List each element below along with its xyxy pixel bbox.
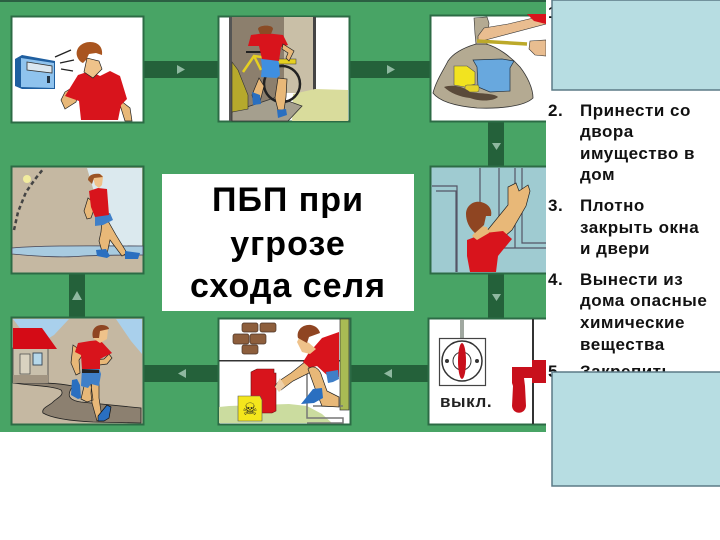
instruction list: Закрепить (580, 362, 672, 381)
icon: sack (433, 44, 533, 108)
title: схода селя (190, 267, 386, 305)
center title panel (162, 174, 414, 311)
instruction list: Вынести из (580, 270, 683, 289)
panel 3: man packs valuables in bag (430, 14, 550, 122)
arrow: panel 3 to 5 (488, 121, 504, 166)
figure: man (466, 183, 530, 272)
instruction list: дом (580, 165, 615, 184)
arrow: panel 8 to 7 (351, 365, 428, 382)
icon: gas valve (512, 360, 546, 413)
instruction list: и двери (580, 239, 650, 258)
switch label: выкл. (440, 392, 492, 411)
panel 7: man removes hazardous chemicals (218, 318, 350, 424)
icon: sack (232, 62, 248, 112)
icon: door frame (307, 319, 349, 423)
panel 5: man closes window (430, 166, 550, 274)
arrow: panel 2 to 3 (350, 61, 430, 78)
arrow: panel 7 to 6 (143, 365, 218, 382)
figure: man (275, 325, 339, 407)
icon: arm with tie (477, 14, 546, 56)
instruction list: вещества (580, 335, 665, 354)
icon: red canister (251, 369, 276, 413)
cover box: bottom (552, 372, 720, 486)
icon: air unit speaker (15, 55, 55, 89)
title (190, 181, 386, 305)
arrow: panel 1 to 2 (143, 61, 218, 78)
panel 4: man walks away from mudflow (12, 166, 144, 274)
instruction list: 1. (548, 3, 563, 22)
icon: falling rocks (14, 168, 44, 230)
green background (0, 0, 546, 432)
icon: bicycle (243, 52, 300, 102)
icon: house with red roof (13, 328, 57, 383)
figure: man from behind (248, 26, 294, 118)
instruction list: 3. (548, 196, 563, 215)
icon: poison bottle: ☠ (242, 400, 258, 419)
icon: blue box (473, 59, 514, 92)
figure: man (61, 42, 132, 121)
icon: yellow canister (454, 66, 475, 87)
panel 8: switch off power and gas (428, 318, 550, 424)
instruction list: имущество в (580, 144, 695, 163)
white right column (546, 0, 720, 540)
figure: runner (71, 325, 112, 421)
figure: man (84, 174, 140, 259)
icon: sound lines (55, 50, 74, 71)
instruction list (548, 3, 707, 381)
instruction list: 2. (548, 101, 563, 120)
arrow: panel 6 to 4 (69, 273, 85, 317)
instruction list: дома опасные (580, 291, 707, 310)
instruction list: Принести со (580, 101, 691, 120)
icon: dirt and coins (444, 86, 498, 100)
panel 2: man brings bicycle inside (218, 16, 350, 122)
instruction list: химические (580, 313, 685, 332)
title: ПБП при (212, 181, 364, 219)
instruction list: Плотно (580, 196, 645, 215)
arrow: panel 5 to 8 (488, 273, 504, 318)
instruction list: двора (580, 122, 634, 141)
panel 6: man runs to safety (12, 318, 144, 424)
instruction list: 5. (548, 362, 563, 381)
icon: bricks (233, 323, 276, 354)
cover box: top (552, 0, 720, 90)
instruction list: закрыть окна (580, 218, 699, 237)
instruction list: 4. (548, 270, 563, 289)
panel 1: man hears the alarm (12, 16, 144, 122)
title: угрозе (230, 225, 346, 263)
icon: electrical switch (440, 319, 486, 386)
